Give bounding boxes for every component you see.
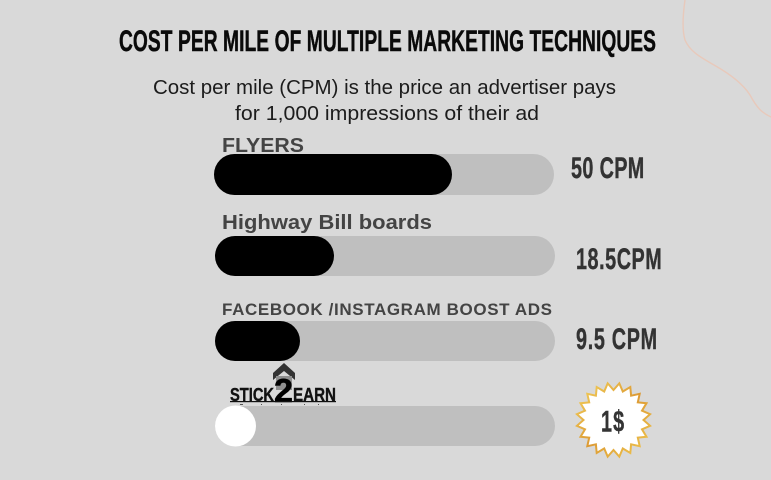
stick2earn bar track <box>215 406 555 446</box>
highway billboards bar fill <box>215 236 334 276</box>
flyers label: FLYERS <box>222 135 304 157</box>
stick2earn logo: STICK <box>230 385 274 405</box>
social boost ads label: FACEBOOK /INSTAGRAM BOOST ADS <box>222 300 552 319</box>
highway billboards label: Highway Bill boards <box>222 212 432 234</box>
panel: flyers row <box>214 135 644 195</box>
title: COST PER MILE OF MULTIPLE MARKETING TECHNIQUES <box>119 25 656 58</box>
subtitle: for 1,000 impressions of their ad <box>235 103 539 125</box>
subtitle: Cost per mile (CPM) is the price an advertiser pays <box>153 77 616 99</box>
panel: highway billboards row <box>215 212 662 276</box>
panel: stick2earn row <box>215 363 650 457</box>
highway billboards bar track <box>215 236 555 276</box>
highway billboards value: 18.5CPM <box>576 243 662 276</box>
stick2earn bar fill <box>215 406 256 446</box>
subtitle <box>153 77 616 125</box>
social boost ads bar track <box>215 321 555 361</box>
price badge <box>577 383 650 457</box>
stick2earn logo: 2 <box>274 372 293 409</box>
social boost ads bar fill <box>215 321 300 361</box>
stick2earn logo: EARN <box>293 385 336 405</box>
flyers value: 50 CPM <box>571 152 644 185</box>
flyers bar fill <box>214 154 452 195</box>
price badge: 1$ <box>601 406 624 439</box>
panel: social boost ads row <box>215 300 657 361</box>
stick2earn logo <box>230 363 336 409</box>
decorative curve <box>683 0 771 117</box>
social boost ads value: 9.5 CPM <box>576 323 657 356</box>
flyers bar track <box>214 154 554 195</box>
